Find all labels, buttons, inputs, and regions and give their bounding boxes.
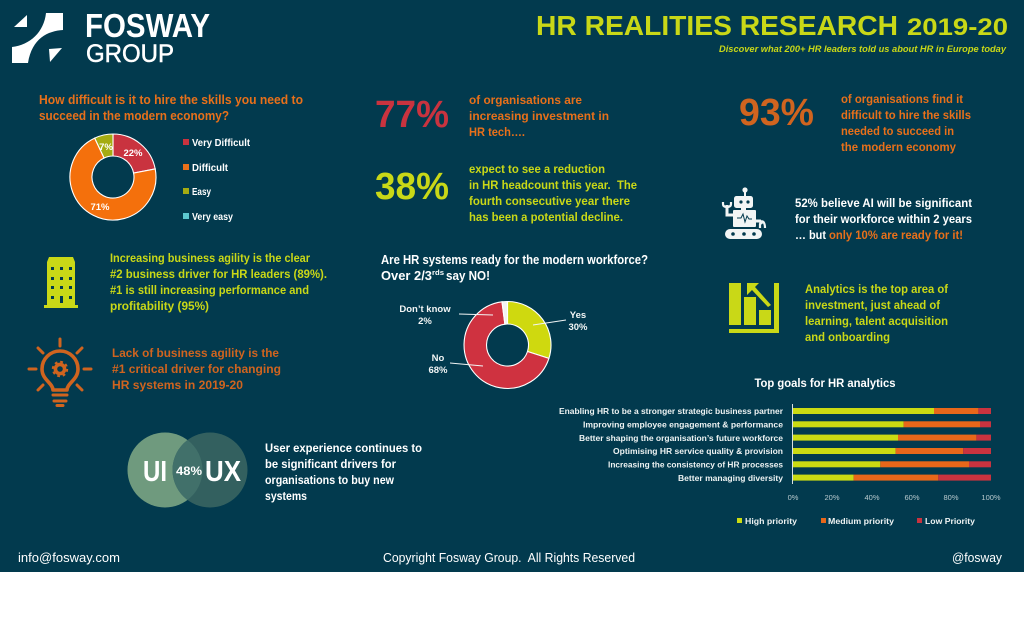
text: investment in HR tech: increasing investment in: [469, 109, 609, 123]
legend: priority levels: Medium priority: [828, 516, 894, 526]
bars: medium priority: [854, 408, 980, 481]
stat: 93%: 93%: [739, 92, 814, 134]
axis tick labels: 20%: [824, 493, 840, 502]
subtitle: Discover what 200+ HR leaders told us about HR in Europe today: [719, 44, 1007, 55]
text: headcount reduction: fourth consecutive year there: [469, 194, 630, 208]
text: headcount reduction: expect to see a reduction: [469, 162, 605, 176]
text: analytics investment: and onboarding: [805, 330, 890, 344]
heading: HR systems question: [381, 253, 648, 283]
donut labels and leader lines: Yes: [570, 310, 586, 321]
slice labels: 22%: [123, 148, 143, 159]
icon: analytics chart: [729, 283, 779, 333]
donut labels and leader lines: 2%: [418, 316, 432, 327]
slice labels: [90, 142, 143, 213]
axis tick labels: 0%: [788, 493, 799, 502]
text: user experience: be significant drivers for: [265, 457, 396, 471]
footer: contact, copyright and social handle: info@fosway.com: [18, 550, 120, 565]
text: lack of agility: #1 critical driver for changing: [112, 362, 281, 376]
axis tick labels: 100%: [981, 493, 1001, 502]
text: investment in HR tech: [469, 93, 609, 139]
legend: priority levels: Low Priority: [925, 516, 975, 526]
text: business agility driver: Increasing business agility is the clear: [110, 251, 310, 265]
legend: priority levels: [737, 516, 975, 526]
text: analytics investment: Analytics is the top area of: [805, 282, 949, 296]
bar chart: top goals for HR analytics: [559, 404, 1001, 502]
donut chart: hiring difficulty: [70, 134, 156, 220]
text: lack of agility: Lack of business agility is the: [112, 346, 279, 360]
text: AI significance: for their workforce within 2 years: [795, 212, 972, 226]
footer: contact, copyright and social handle: Copyright Fosway Group. All Rights Reserved: [383, 550, 635, 565]
text: analytics investment: [805, 282, 949, 344]
text: headcount reduction: has been a potential decline.: [469, 210, 623, 224]
axis tick labels: 60%: [904, 493, 920, 502]
text: investment in HR tech: HR tech….: [469, 125, 525, 139]
title: HR REALITIES RESEARCH: [536, 10, 898, 41]
text: AI significance: only 10% are ready for it!: [829, 228, 963, 242]
stat: 77%: 77%: [375, 94, 449, 136]
text: investment in HR tech: of organisations are: [469, 93, 582, 107]
text: difficult to hire: difficult to hire the skills: [841, 108, 971, 122]
legend: hiring difficulty: [183, 138, 251, 223]
heading: HR systems question: Are HR systems ready for the modern workforce?: [381, 253, 648, 267]
text: analytics investment: learning, talent acquisition: [805, 314, 948, 328]
text: AI significance: … but: [795, 228, 826, 242]
row labels: [559, 406, 784, 483]
venn diagram: UI and UX: 48%: [176, 466, 202, 478]
slice: difficult 71%: [70, 138, 156, 220]
slice: very difficult 22%: [113, 134, 155, 173]
footer: contact, copyright and social handle: @fosway: [952, 550, 1002, 565]
donut labels and leader lines: Don’t know: [399, 304, 451, 315]
text: lack of agility: [112, 346, 281, 392]
stat: 38%: 38%: [375, 166, 449, 208]
row labels: Increasing the consistency of HR processes: [608, 460, 783, 470]
logo: Fosway Group: [12, 7, 210, 68]
text: headcount reduction: [469, 162, 637, 224]
donut labels and leader lines: 30%: [568, 322, 588, 333]
heading: HR systems question: Over 2/3: [381, 269, 432, 283]
slice: don't know 2%: [502, 301, 508, 324]
donut labels and leader lines: 68%: [428, 365, 448, 376]
row labels: Enabling HR to be a stronger strategic business partner: [559, 406, 784, 416]
icon: office building: [44, 257, 78, 308]
heading: hiring difficulty question: succeed in the modern economy?: [39, 109, 229, 123]
axis line: [792, 404, 793, 484]
text: user experience: User experience continues to: [265, 441, 422, 455]
venn diagram: UI and UX: UX: [205, 456, 242, 488]
text: difficult to hire: the modern economy: [841, 140, 956, 154]
row labels: Optimising HR service quality & provision: [613, 446, 783, 456]
heading: hiring difficulty question: How difficult is it to hire the skills you need to: [39, 93, 303, 107]
slice: no 68%: [464, 302, 549, 388]
donut labels and leader lines: [399, 304, 588, 376]
bars: low priority: [938, 408, 991, 481]
footer: contact, copyright and social handle: [18, 550, 1002, 565]
heading: top goals: Top goals for HR analytics: [754, 378, 896, 390]
text: difficult to hire: [841, 92, 971, 154]
legend: priority levels: High priority: [745, 516, 797, 526]
text: business agility driver: #1 is still increasing performance and: [110, 283, 309, 297]
slice labels: 71%: [90, 202, 110, 213]
donut labels and leader lines: No: [432, 353, 445, 364]
text: AI significance: [795, 196, 972, 242]
text: lack of agility: HR systems in 2019-20: [112, 378, 243, 392]
row labels: Improving employee engagement & performance: [583, 420, 783, 430]
heading: HR systems question: rds: [432, 270, 444, 277]
icon: light bulb with gear: [29, 339, 91, 406]
text: analytics investment: investment, just ahead of: [805, 298, 941, 312]
axis tick labels: 80%: [943, 493, 959, 502]
legend: hiring difficulty: Very easy: [192, 212, 233, 223]
text: AI significance: 52% believe AI will be significant: [795, 196, 972, 210]
text: business agility driver: [110, 251, 327, 313]
logo: Fosway Group: FOSWAY: [85, 7, 210, 44]
heading: hiring difficulty question: [39, 93, 303, 123]
text: headcount reduction: in HR headcount this year. The: [469, 178, 637, 192]
slice: easy 7%: [95, 134, 113, 158]
heading: HR systems question: say NO!: [446, 269, 490, 283]
row labels: Better shaping the organisation’s future workforce: [579, 433, 783, 443]
text: business agility driver: #2 business driver for HR leaders (89%).: [110, 267, 327, 281]
legend: hiring difficulty: Easy: [192, 187, 211, 198]
row labels: Better managing diversity: [678, 473, 783, 483]
legend: hiring difficulty: Difficult: [192, 163, 229, 174]
text: business agility driver: profitability (95%): [110, 299, 209, 313]
slice labels: 7%: [99, 142, 113, 153]
legend: hiring difficulty: Very Difficult: [192, 138, 251, 149]
slice: yes 30%: [508, 302, 551, 358]
logo: Fosway Group: GROUP: [86, 40, 174, 68]
text: difficult to hire: needed to succeed in: [841, 124, 954, 138]
axis tick labels: [788, 493, 1001, 502]
text: user experience: [265, 441, 422, 503]
axis tick labels: 40%: [864, 493, 880, 502]
text: difficult to hire: of organisations find it: [841, 92, 963, 106]
venn diagram: UI and UX: [128, 432, 248, 508]
venn diagram: UI and UX: UI: [143, 456, 167, 488]
text: user experience: organisations to buy new: [265, 473, 395, 487]
donut chart: HR systems readiness: [464, 301, 551, 388]
bars: high priority: [793, 408, 934, 481]
title: 2019-20: [907, 14, 1008, 41]
text: user experience: systems: [265, 489, 307, 503]
icon: robot: [723, 187, 765, 239]
